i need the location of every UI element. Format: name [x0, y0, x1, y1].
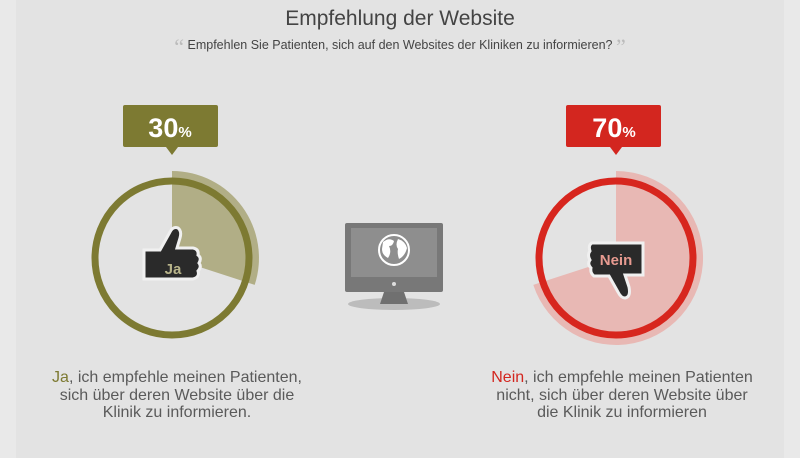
icon: thumbs down: [588, 243, 643, 298]
caption: no: die Klinik zu informieren: [537, 404, 707, 421]
caption: yes: Ja, ich empfehle meinen Patienten,: [52, 369, 302, 386]
caption: yes: Klinik zu informieren.: [103, 404, 251, 421]
chart: no 70%: [533, 171, 703, 345]
icon: monitor with globe: [345, 223, 443, 310]
caption: yes: [52, 369, 302, 421]
label: 70%: [566, 105, 661, 155]
caption: yes: sich über deren Website über die: [60, 386, 294, 404]
label: 30%: 30%: [148, 113, 192, 143]
icon: thumbs up: Ja: [165, 261, 182, 278]
title: Empfehlung der Website: [285, 7, 515, 30]
caption: no: nicht, sich über deren Website über: [496, 386, 748, 404]
label: 30%: [123, 105, 218, 155]
subtitle question: “ Empfehlen Sie Patienten, sich auf den Websites der Kliniken zu informieren? ”: [174, 34, 626, 59]
label: 70%: 70%: [592, 113, 636, 143]
chart: yes 30%: [95, 171, 259, 335]
icon: thumbs down: Nein: [600, 252, 632, 269]
caption: no: Nein, ich empfehle meinen Patienten: [491, 369, 753, 386]
icon: thumbs up: [144, 228, 200, 279]
caption: no: [491, 369, 753, 421]
